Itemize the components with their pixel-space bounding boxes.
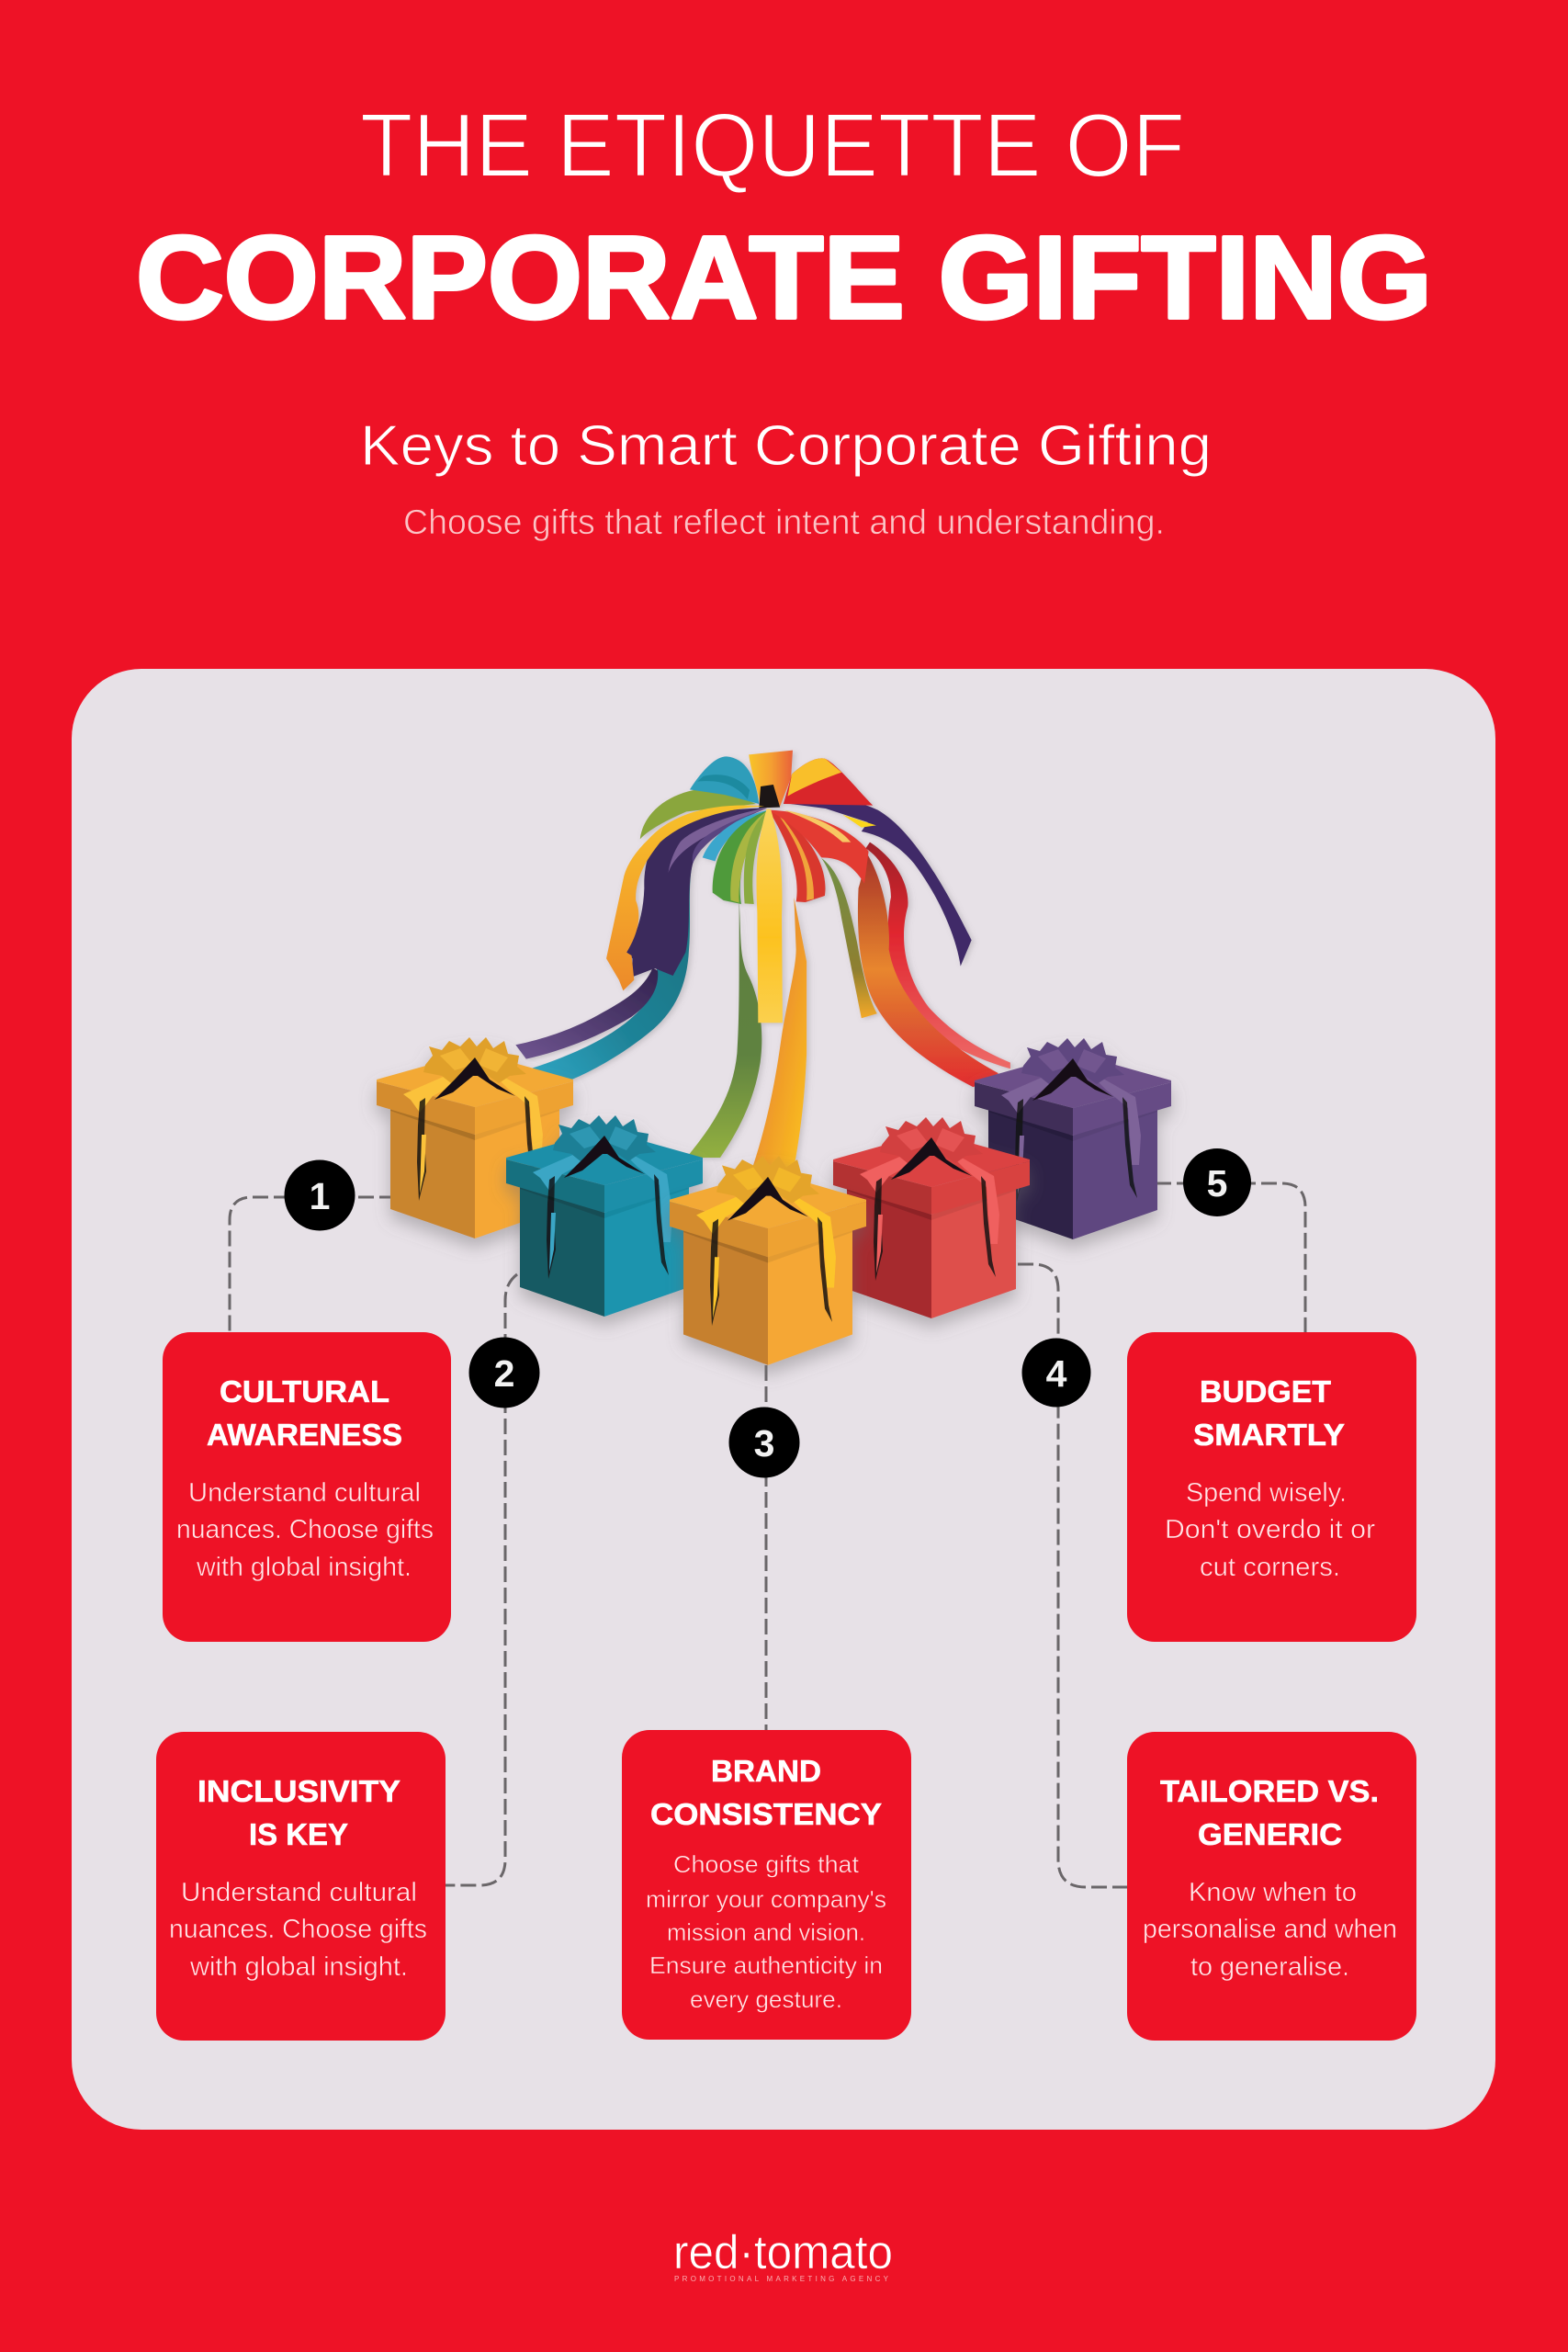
card: brand consistency: CONSISTENCY bbox=[650, 1797, 882, 1831]
card: cultural awareness: CULTURAL bbox=[220, 1374, 389, 1408]
badge 5: 5 bbox=[1207, 1162, 1227, 1204]
card: brand consistency: BRAND bbox=[711, 1754, 821, 1788]
connector 2 bbox=[446, 1274, 517, 1885]
bow loop: green bbox=[640, 788, 756, 839]
card: budget smartly: BUDGET bbox=[1200, 1374, 1331, 1408]
gift box: yellow left bbox=[377, 1037, 573, 1238]
band: purple left bbox=[626, 808, 767, 977]
ribbon tail: red orange bbox=[858, 852, 998, 1087]
dome: blue bbox=[703, 810, 769, 861]
card: cultural awareness: AWARENESS bbox=[207, 1418, 402, 1452]
ribbon tail: purple right bbox=[784, 799, 972, 967]
card: brand consistency: mission and vision. bbox=[667, 1918, 865, 1946]
tagline: Choose gifts that reflect intent and understanding. bbox=[403, 503, 1165, 542]
card: inclusivity is key: nuances. Choose gifts bbox=[169, 1915, 427, 1944]
ribbon tail: purple to box bbox=[515, 967, 658, 1059]
badge 2: 2 bbox=[494, 1352, 514, 1395]
badge 1: 1 bbox=[310, 1175, 330, 1217]
logo: red tomato: red·tomato bbox=[673, 2226, 893, 2279]
card: tailored vs generic: GENERIC bbox=[1198, 1817, 1342, 1851]
card: tailored vs generic: personalise and when bbox=[1143, 1915, 1397, 1944]
ribbon tail: orange yellow centre bbox=[750, 898, 807, 1176]
card: budget smartly: cut corners. bbox=[1200, 1553, 1340, 1582]
card: inclusivity is key: with global insight. bbox=[189, 1952, 408, 1982]
dome: green bbox=[713, 810, 769, 904]
bow knot bbox=[759, 785, 780, 808]
card: cultural awareness: with global insight. bbox=[196, 1553, 412, 1582]
bow loop: upright yellow orange bbox=[749, 751, 793, 806]
ribbon tail: thin green bbox=[821, 858, 877, 1018]
card: budget smartly bbox=[1127, 1332, 1416, 1642]
dome: red bbox=[769, 810, 826, 902]
card: tailored vs generic bbox=[1127, 1732, 1416, 2041]
connector 1 bbox=[230, 1197, 395, 1332]
card: inclusivity is key: IS KEY bbox=[249, 1817, 348, 1851]
logo: red tomato: PROMOTIONAL MARKETING AGENCY bbox=[674, 2275, 889, 2283]
card: budget smartly: Don't overdo it or bbox=[1165, 1515, 1375, 1544]
card: budget smartly: SMARTLY bbox=[1193, 1418, 1345, 1452]
card: tailored vs generic: Know when to bbox=[1189, 1878, 1357, 1907]
band: orange left bbox=[606, 805, 764, 990]
badge 2 bbox=[468, 1338, 540, 1408]
connector 3 bbox=[764, 1365, 768, 1730]
gift box: purple right bbox=[975, 1038, 1171, 1239]
illustration: ribbons bbox=[515, 751, 1010, 1176]
card: brand consistency: every gesture. bbox=[690, 1985, 842, 2013]
card: inclusivity is key: INCLUSIVITY bbox=[197, 1774, 400, 1808]
ribbon tail: green centre bbox=[686, 900, 761, 1158]
card: inclusivity is key: Understand cultural bbox=[181, 1878, 417, 1907]
card: inclusivity is key bbox=[156, 1732, 446, 2041]
card: budget smartly: Spend wisely. bbox=[1186, 1478, 1347, 1508]
badge 1 bbox=[285, 1159, 355, 1231]
badge 3 bbox=[729, 1408, 799, 1477]
card: cultural awareness: Understand cultural bbox=[188, 1478, 421, 1508]
gift box: yellow centre bbox=[670, 1156, 866, 1365]
card: tailored vs generic: to generalise. bbox=[1190, 1952, 1349, 1982]
ribbon tail: teal to box bbox=[530, 861, 693, 1081]
card: brand consistency: Ensure authenticity in bbox=[649, 1951, 883, 1979]
badge 5 bbox=[1183, 1148, 1251, 1216]
card: cultural awareness bbox=[163, 1332, 451, 1642]
gift box: red bbox=[833, 1117, 1030, 1318]
title line: the etiquette of: THE ETIQUETTE OF bbox=[360, 95, 1185, 196]
gift box: teal bbox=[506, 1115, 703, 1317]
subtitle: Keys to Smart Corporate Gifting bbox=[360, 414, 1212, 478]
card: brand consistency: Choose gifts that bbox=[673, 1850, 860, 1878]
card: brand consistency: mirror your company's bbox=[646, 1885, 886, 1913]
panel: main content bbox=[72, 669, 1495, 2130]
badge 4: 4 bbox=[1046, 1352, 1067, 1395]
card: brand consistency bbox=[622, 1730, 911, 2040]
ribbon tail: red to pink bbox=[865, 842, 1010, 1069]
bow loop: teal bbox=[690, 756, 759, 804]
badge 3: 3 bbox=[754, 1422, 774, 1464]
badge 4 bbox=[1021, 1338, 1091, 1408]
title bbox=[136, 95, 1432, 344]
connector 4 bbox=[1018, 1264, 1127, 1887]
centre ribbon: yellow bbox=[757, 809, 783, 1023]
bow loop: yellow red bbox=[784, 758, 873, 806]
card: cultural awareness: nuances. Choose gifts bbox=[176, 1515, 434, 1544]
dome: right bbox=[769, 810, 869, 884]
title line: corporate gifting: CORPORATE GIFTING bbox=[136, 212, 1432, 344]
connector 5 bbox=[1156, 1183, 1305, 1332]
card: tailored vs generic: TAILORED VS. bbox=[1160, 1774, 1379, 1808]
